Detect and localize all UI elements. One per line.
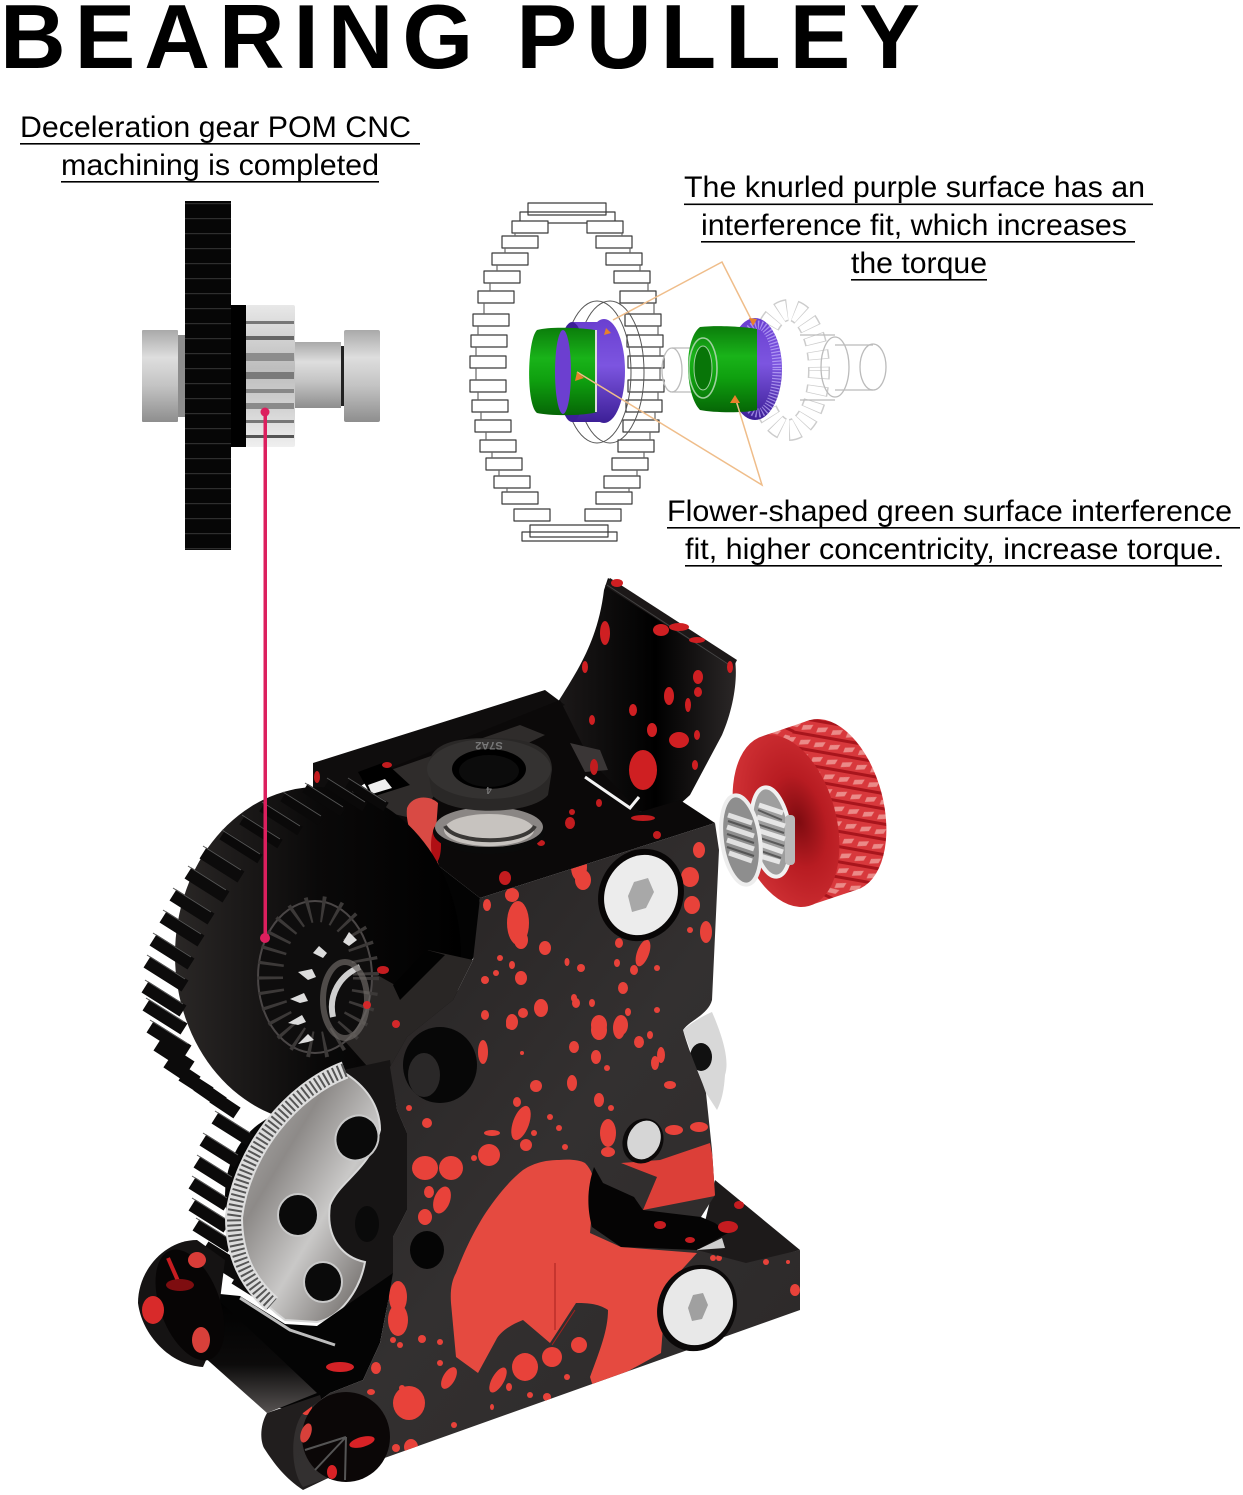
red paint on front face <box>300 842 800 1455</box>
caption: deceleration gear: machining is completed <box>61 149 379 182</box>
push-fit connector: 4 <box>486 784 492 795</box>
large red blotch <box>451 1160 697 1390</box>
silver knurled drive wheel <box>230 1070 387 1322</box>
small light triangle by the notch <box>697 1238 725 1250</box>
right purple knurled ring <box>728 318 782 420</box>
left cap <box>142 330 178 422</box>
roller shaft <box>193 1292 317 1413</box>
orange callout lines <box>577 262 762 485</box>
wireframe large gear <box>470 203 664 541</box>
notch red reflections <box>654 1201 744 1243</box>
caption: flower-shaped green surface: Flower-shaped green surface interference <box>667 495 1232 528</box>
roller end cap <box>138 1240 238 1370</box>
caption: knurled purple surface: interference fit, which increases <box>701 209 1127 242</box>
black body side <box>300 807 480 1300</box>
upper right red blotch <box>621 1143 720 1210</box>
right shaft <box>295 342 341 408</box>
small slots <box>358 743 639 808</box>
caption: flower-shaped green surface: fit, higher concentricity, increase torque. <box>685 533 1222 566</box>
left green flower bushing <box>529 328 597 415</box>
top surface <box>363 700 715 898</box>
small body hole <box>410 1231 444 1269</box>
gear mesh shadow region <box>210 1273 393 1413</box>
pinion and shaft <box>258 901 473 1075</box>
lever <box>558 578 737 812</box>
spring and washers <box>716 785 796 887</box>
caption: deceleration gear: Deceleration gear POM CNC <box>20 111 411 144</box>
caption: knurled purple surface <box>684 171 1153 281</box>
wheel holes <box>327 1108 387 1168</box>
black hub <box>230 305 246 447</box>
orange arrowheads <box>575 318 757 403</box>
gear side-view photo <box>142 201 380 550</box>
right green flower bushing <box>688 326 757 412</box>
back rim <box>313 690 565 800</box>
shiny notch in the body <box>588 1167 728 1250</box>
silver rear washer <box>683 1012 727 1110</box>
small silver pin <box>615 1112 671 1170</box>
exploded gear diagram <box>470 203 886 541</box>
wheel dark hub <box>300 1060 407 1320</box>
faint right gear and shafts <box>662 310 886 430</box>
thin scratch mark <box>552 1263 575 1345</box>
lower hex screw <box>643 1252 751 1364</box>
right cap <box>344 330 380 422</box>
lever red splashes <box>582 579 733 790</box>
lower roller end <box>261 1395 345 1490</box>
wireframe hub rings <box>563 301 644 443</box>
extruder product illustration <box>138 578 904 1490</box>
large black gear <box>145 778 461 1123</box>
left purple knurled ring <box>558 319 625 423</box>
lower block top surface <box>697 1180 800 1265</box>
top surface red splashes <box>314 759 661 920</box>
caption: flower-shaped green surface <box>667 495 1240 567</box>
push-fit connector: S7A2 <box>475 739 503 751</box>
red splatter dots <box>300 842 800 1455</box>
mesh highlights <box>240 1298 354 1372</box>
silver pinion <box>246 305 295 447</box>
left collar <box>178 335 186 417</box>
caption: knurled purple surface: The knurled purple surface has an <box>684 171 1145 204</box>
lower end hole <box>298 1392 390 1482</box>
top hex screw <box>583 835 699 955</box>
lower black gear <box>192 1110 375 1300</box>
pointer line from pinion to extruder <box>260 408 270 943</box>
caption: knurled purple surface: the torque <box>851 247 987 280</box>
large body hole <box>403 1027 477 1103</box>
front face <box>293 823 800 1487</box>
red knurled thumb knob <box>715 707 904 919</box>
large black gear <box>185 201 231 550</box>
push-fit connector <box>427 738 552 854</box>
caption: deceleration gear <box>20 111 420 183</box>
